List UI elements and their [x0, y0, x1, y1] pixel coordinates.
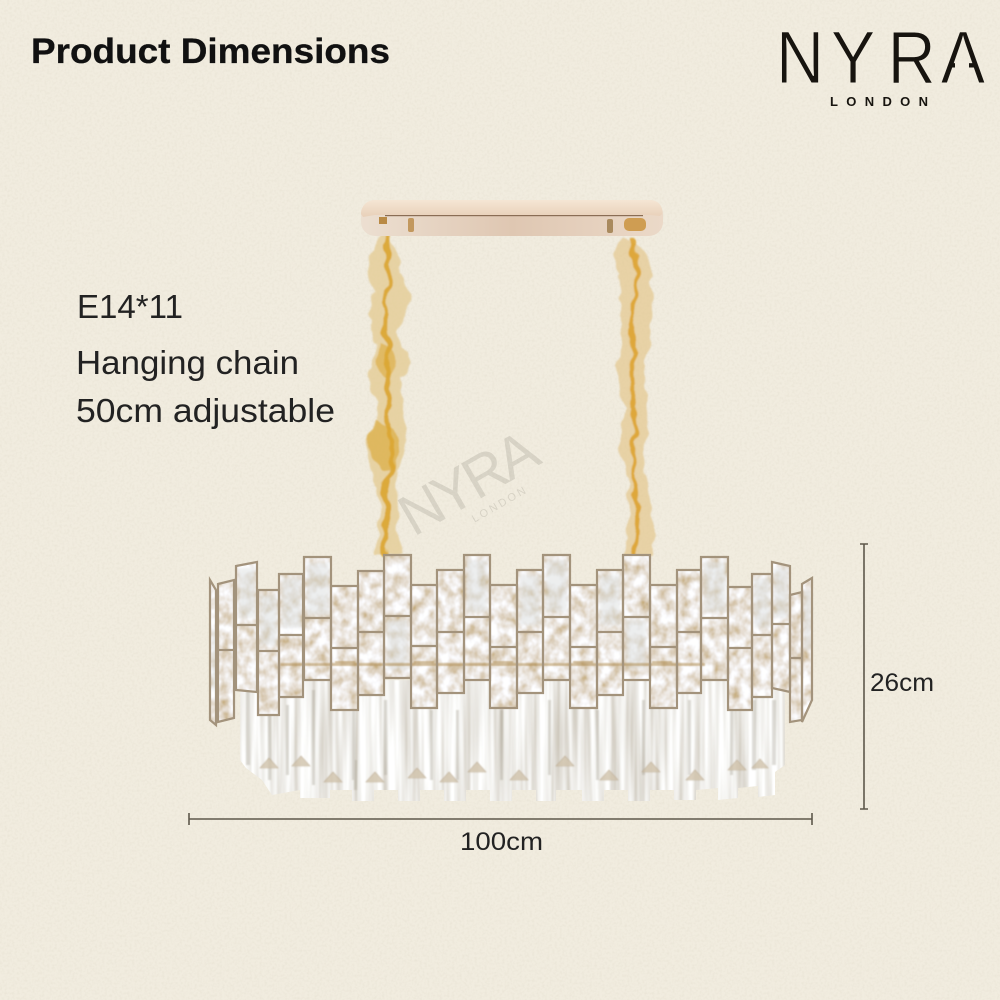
crystal panels: upper tier: [210, 555, 812, 725]
chandelier canopy: [361, 200, 663, 236]
title: Product Dimensions: [31, 32, 390, 71]
watermark: NYRA: [388, 417, 550, 548]
dimension: height 26cm: 26cm: [870, 669, 934, 697]
bluish-white highlights: [212, 560, 811, 690]
dimension: width 100cm: 100cm: [460, 828, 543, 856]
chandelier chains: [368, 236, 653, 558]
dimension: width 100cm: [189, 813, 812, 856]
spec text: bulb type: E14*11: [77, 288, 183, 325]
metal frames: [210, 555, 812, 725]
spec text: hanging chain: 50cm adjustable: [76, 392, 335, 429]
crystal rods: lower tier: [240, 680, 785, 805]
spec text: hanging chain: [76, 344, 335, 429]
glass panel fill: [210, 555, 812, 725]
logo: NYRA London: LONDON: [830, 94, 928, 109]
dimension: height 26cm: [860, 544, 934, 809]
gold accent band: [280, 661, 705, 666]
logo: NYRA London: NYRA: [776, 16, 985, 99]
watermark: LONDON: [470, 485, 528, 525]
spec text: hanging chain: Hanging chain: [76, 344, 299, 381]
